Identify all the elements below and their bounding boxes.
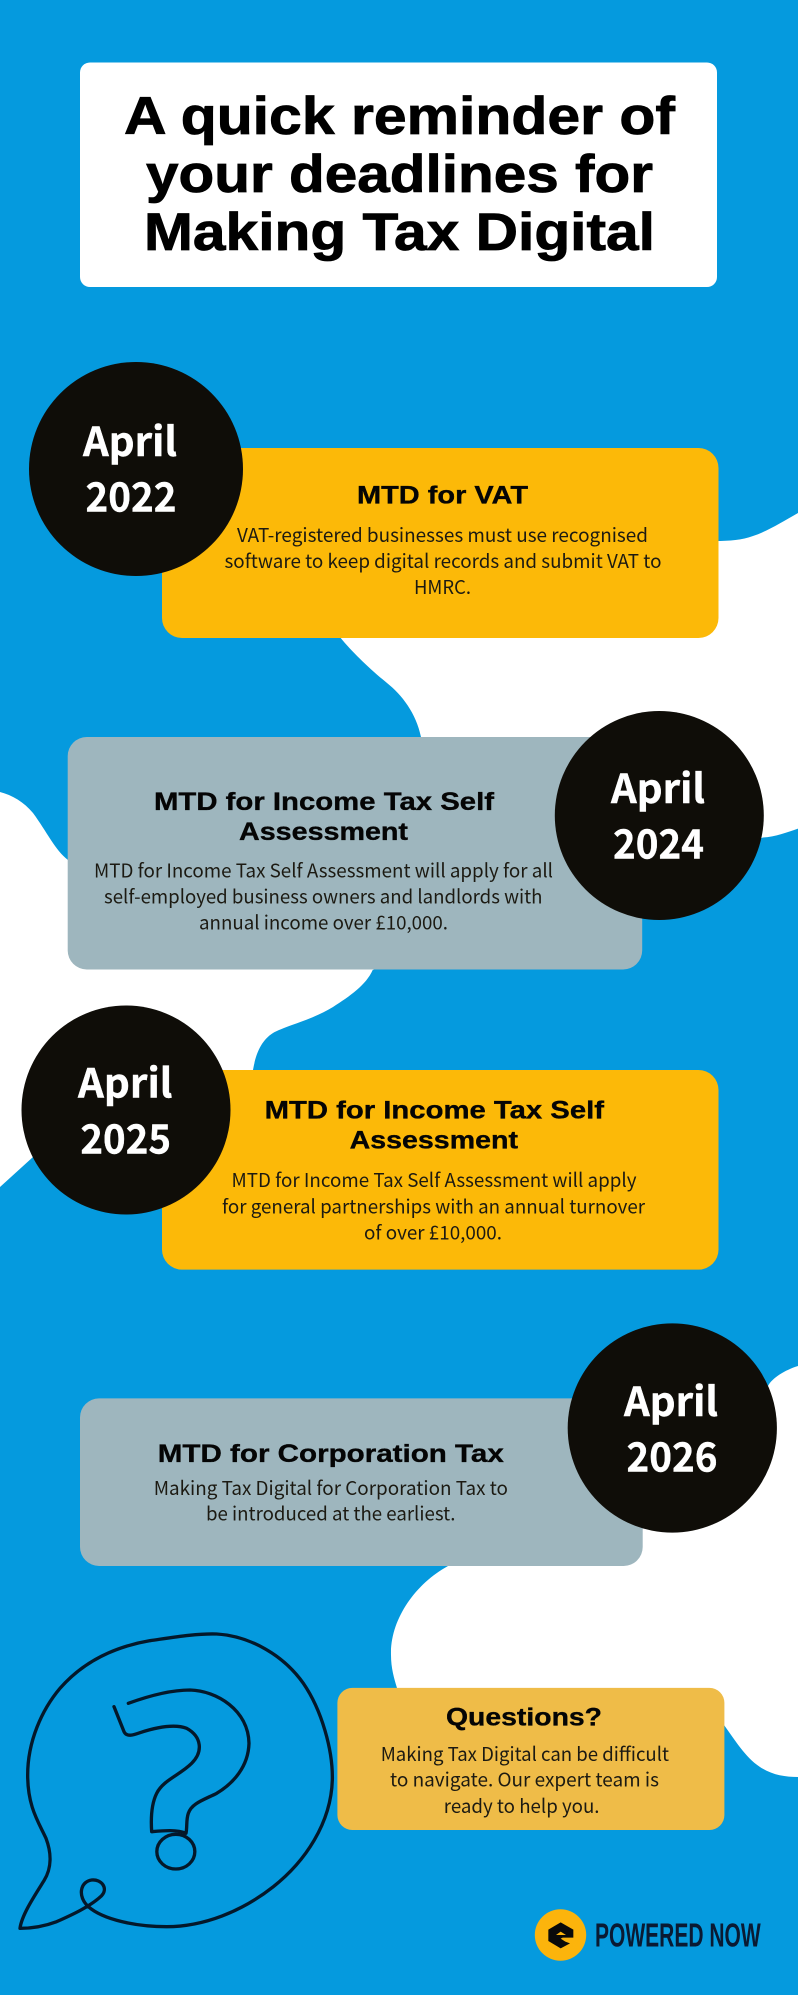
body text: MTD for Income Tax Self Assessment will apply: [232, 1166, 637, 1193]
body text: ready to help you.: [444, 1792, 600, 1819]
date badge: [22, 1006, 230, 1214]
heading: MTD for Corporation Tax: [158, 1440, 504, 1468]
date badge: 2025: [80, 1108, 171, 1166]
heading: Assessment: [239, 818, 409, 846]
heading: [265, 1097, 605, 1155]
question mark: [114, 1690, 249, 1833]
speech bubble outline: [20, 1634, 332, 1928]
white wave shape: middle: [0, 513, 798, 1187]
heading: MTD for VAT: [357, 482, 528, 510]
body text: annual income over £10,000.: [199, 908, 448, 936]
panel: April 2026 MTD for Corporation Tax: [80, 1323, 777, 1566]
body text: VAT-registered businesses must use recognised: [237, 521, 648, 548]
date badge: [29, 362, 243, 576]
heading: Assessment: [350, 1127, 519, 1155]
body text: for general partnerships with an annual turnover: [222, 1192, 646, 1219]
body text: Making Tax Digital for Corporation Tax to: [154, 1474, 508, 1501]
date badge: 2022: [86, 466, 176, 524]
heading: MTD for Income Tax Self: [265, 1097, 605, 1125]
question mark dot: [157, 1834, 195, 1869]
body text: HMRC.: [414, 573, 471, 600]
card: [162, 448, 718, 638]
white wave shape: bottom right: [391, 1366, 798, 1777]
body text: software to keep digital records and submit VAT to: [224, 547, 662, 574]
title: A quick reminder of: [124, 87, 675, 146]
date badge: 2026: [626, 1426, 718, 1484]
body text: self-employed business owners and landlords with: [104, 883, 542, 910]
body text: [94, 857, 553, 936]
card: [337, 1688, 724, 1830]
card: [80, 1398, 643, 1566]
body text: Making Tax Digital can be difficult: [381, 1740, 669, 1767]
body text: to navigate. Our expert team is: [390, 1766, 659, 1793]
date badge: April: [610, 757, 705, 815]
body text: MTD for Income Tax Self Assessment will apply for all: [94, 857, 553, 884]
panel: questions: [337, 1688, 724, 1830]
heading: MTD for Income Tax Self: [154, 788, 495, 816]
body text: [154, 1474, 508, 1526]
title: your deadlines for: [146, 145, 653, 204]
title: [80, 62, 717, 287]
card: [68, 737, 642, 970]
body text: of over £10,000.: [364, 1218, 502, 1245]
date badge: [568, 1323, 777, 1533]
body text: be introduced at the earliest.: [206, 1499, 456, 1526]
date badge: 2024: [613, 813, 704, 871]
body text: [222, 1166, 646, 1245]
icon: speech bubble with question mark: [20, 1634, 332, 1928]
panel: April 2024 MTD for Income Tax Self Assessment: [68, 711, 764, 970]
date badge: April: [623, 1370, 718, 1428]
panel: April 2022 MTD for VAT: [29, 362, 718, 638]
logo mark: [535, 1909, 586, 1961]
logo: Powered Now: [535, 1909, 761, 1961]
date badge: April: [82, 410, 177, 468]
heading: Questions?: [446, 1704, 602, 1732]
body text: [381, 1740, 669, 1819]
panel: April 2025 MTD for Income Tax Self Assessment: [22, 1006, 718, 1270]
date badge: April: [77, 1051, 172, 1109]
card: [162, 1070, 718, 1270]
body text: [224, 521, 662, 600]
heading: [154, 788, 495, 846]
date badge: [555, 711, 764, 920]
title: Making Tax Digital: [144, 203, 655, 262]
